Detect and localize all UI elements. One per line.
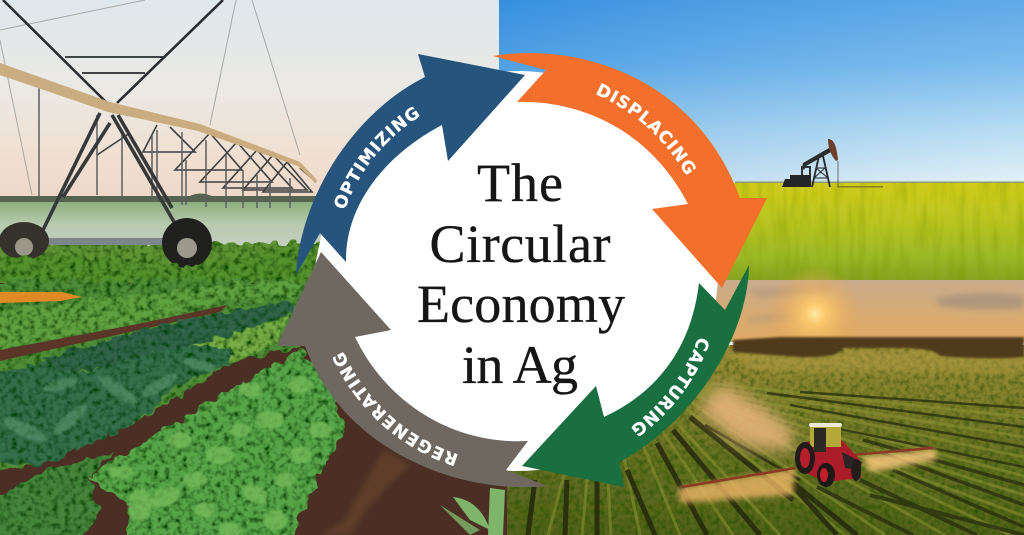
sky xyxy=(0,0,500,198)
row: light green ground cover xyxy=(150,317,287,362)
photo: oil pumpjack in green field xyxy=(499,0,1024,280)
blue sky xyxy=(499,0,1024,183)
axle xyxy=(48,238,166,245)
green crop band xyxy=(0,243,340,295)
row: thin dark kale xyxy=(43,300,293,373)
white centre disc xyxy=(318,71,718,471)
title: in Ag xyxy=(462,335,578,395)
main pipe xyxy=(0,63,317,183)
right side row gaps xyxy=(767,392,1024,535)
spray boom xyxy=(682,448,933,487)
tractor xyxy=(795,423,862,487)
grey arrow shape xyxy=(277,252,547,487)
title xyxy=(417,153,625,395)
right boom glow xyxy=(862,449,936,472)
title: Circular xyxy=(430,214,611,274)
label: regenerating: REGENERATING xyxy=(333,352,458,466)
pivot X frame xyxy=(3,0,223,103)
gold light on field xyxy=(725,352,1024,372)
sky horizontal tint xyxy=(499,0,1024,183)
left wheel xyxy=(0,222,49,260)
white gap wedge left xyxy=(312,232,360,300)
title: The xyxy=(477,153,563,213)
right wheel xyxy=(162,218,212,268)
horizon line xyxy=(735,182,1024,183)
trodden path xyxy=(320,450,410,535)
arrow: displacing xyxy=(493,53,767,288)
row: soil strip xyxy=(0,305,227,361)
soil base xyxy=(0,283,510,535)
spray plume xyxy=(697,383,793,453)
light crop ridges xyxy=(548,340,1024,535)
bottom right seedling xyxy=(440,488,505,535)
arrow: regenerating xyxy=(277,252,547,488)
truss spans xyxy=(97,125,316,192)
kale leaves xyxy=(0,356,219,446)
arrow: optimizing xyxy=(296,54,525,275)
row: light green seedlings xyxy=(0,280,300,350)
label: displacing: DISPLACING xyxy=(596,83,696,175)
title: Economy xyxy=(417,274,625,334)
irrigation mist over crop xyxy=(0,202,330,246)
row: low herbs xyxy=(0,453,117,535)
far field and rows xyxy=(507,345,1024,535)
tree line xyxy=(733,337,1024,358)
left side row gaps xyxy=(528,417,857,535)
sunset sky xyxy=(507,280,1024,342)
drop hoses xyxy=(39,88,290,208)
left boom glow xyxy=(678,468,795,503)
green arrow shape xyxy=(522,265,749,487)
blue arrow shape xyxy=(296,54,525,275)
pivot A-frame legs xyxy=(43,113,177,230)
green ground between rows xyxy=(0,280,315,470)
faint guy wires xyxy=(0,0,300,195)
pumpjack xyxy=(782,139,883,188)
row: big kale xyxy=(0,347,232,466)
grass field xyxy=(720,183,1024,280)
row: big bright leaves xyxy=(87,350,347,535)
horizon tree line xyxy=(0,194,330,202)
label: optimizing: OPTIMIZING xyxy=(334,106,420,208)
photo: vegetable rows xyxy=(0,280,510,535)
arrow: capturing xyxy=(522,265,749,487)
clouds xyxy=(745,284,1024,324)
bright leaf blobs xyxy=(107,377,331,535)
foreground grass xyxy=(0,246,340,300)
photo: tractor spraying at sunset xyxy=(507,266,1024,535)
orange arrow shape xyxy=(493,53,767,288)
sun glow xyxy=(767,266,863,362)
photo: centre-pivot irrigation over farm field xyxy=(0,0,500,300)
label: capturing: CAPTURING xyxy=(632,338,709,436)
orange marigold strip xyxy=(0,292,82,303)
